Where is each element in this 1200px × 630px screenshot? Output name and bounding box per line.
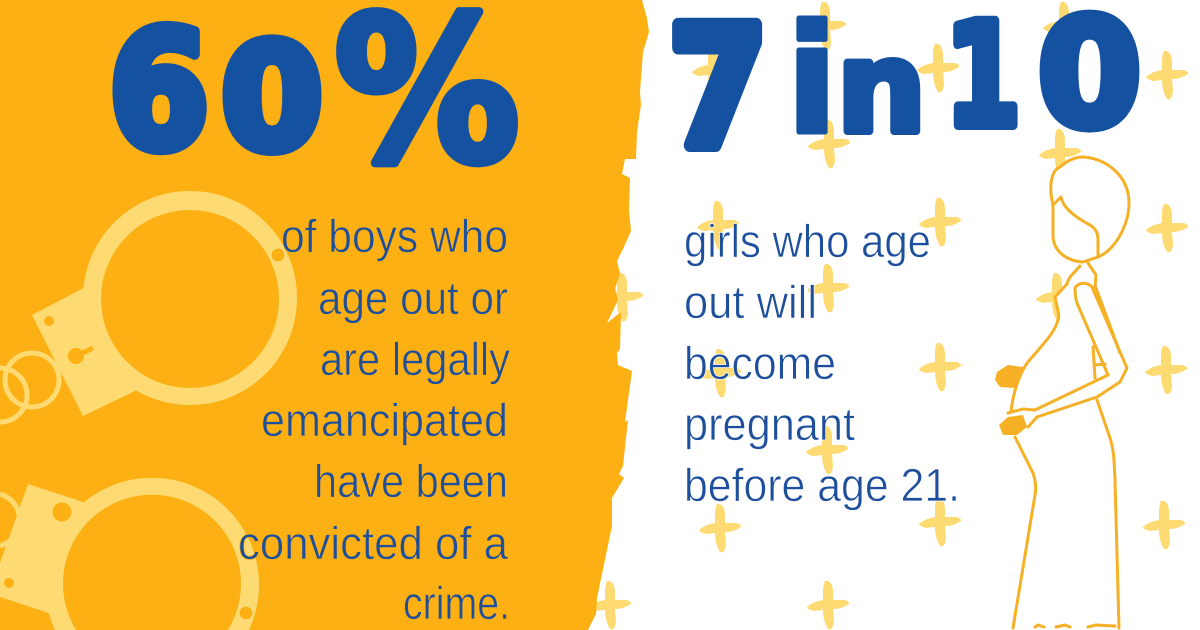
icon: lower handcuff <box>0 478 259 630</box>
heading: 60% <box>109 0 520 208</box>
icon: upper hand <box>995 365 1023 388</box>
text block: boys statistic: age out or <box>318 272 508 324</box>
text block: boys statistic: of boys who <box>281 210 508 262</box>
text block: boys statistic: convicted of a <box>238 517 508 569</box>
text block: girls statistic: girls who age <box>684 215 931 267</box>
heading: 60%: 0 <box>222 14 322 183</box>
text block: girls statistic: pregnant <box>684 398 855 450</box>
text block: boys statistic: have been <box>314 455 508 507</box>
text block: boys statistic: emancipated <box>261 394 508 446</box>
handcuffs illustration <box>0 191 297 630</box>
heading: 7 in 10 <box>669 0 1141 185</box>
icon: upper handcuff <box>32 191 297 416</box>
heading: 7 in 10: n <box>837 16 926 161</box>
text block: girls statistic: before age 21. <box>684 459 960 511</box>
text block: boys statistic: crime. <box>403 577 510 629</box>
text block: girls statistic: out will <box>684 276 817 328</box>
text block: girls statistic <box>684 215 960 511</box>
icon: pregnant woman outline <box>995 157 1129 628</box>
icon: lower hand <box>999 415 1027 435</box>
text block: girls statistic: become <box>684 337 836 389</box>
text block: boys statistic <box>238 210 510 629</box>
decorative yellow crosses on white panel <box>589 2 1188 629</box>
heading: 60%: 6 <box>109 0 209 186</box>
panel: orange torn-edge background <box>0 0 649 630</box>
text block: boys statistic: are legally <box>320 333 510 385</box>
icon: chain links <box>0 353 59 546</box>
